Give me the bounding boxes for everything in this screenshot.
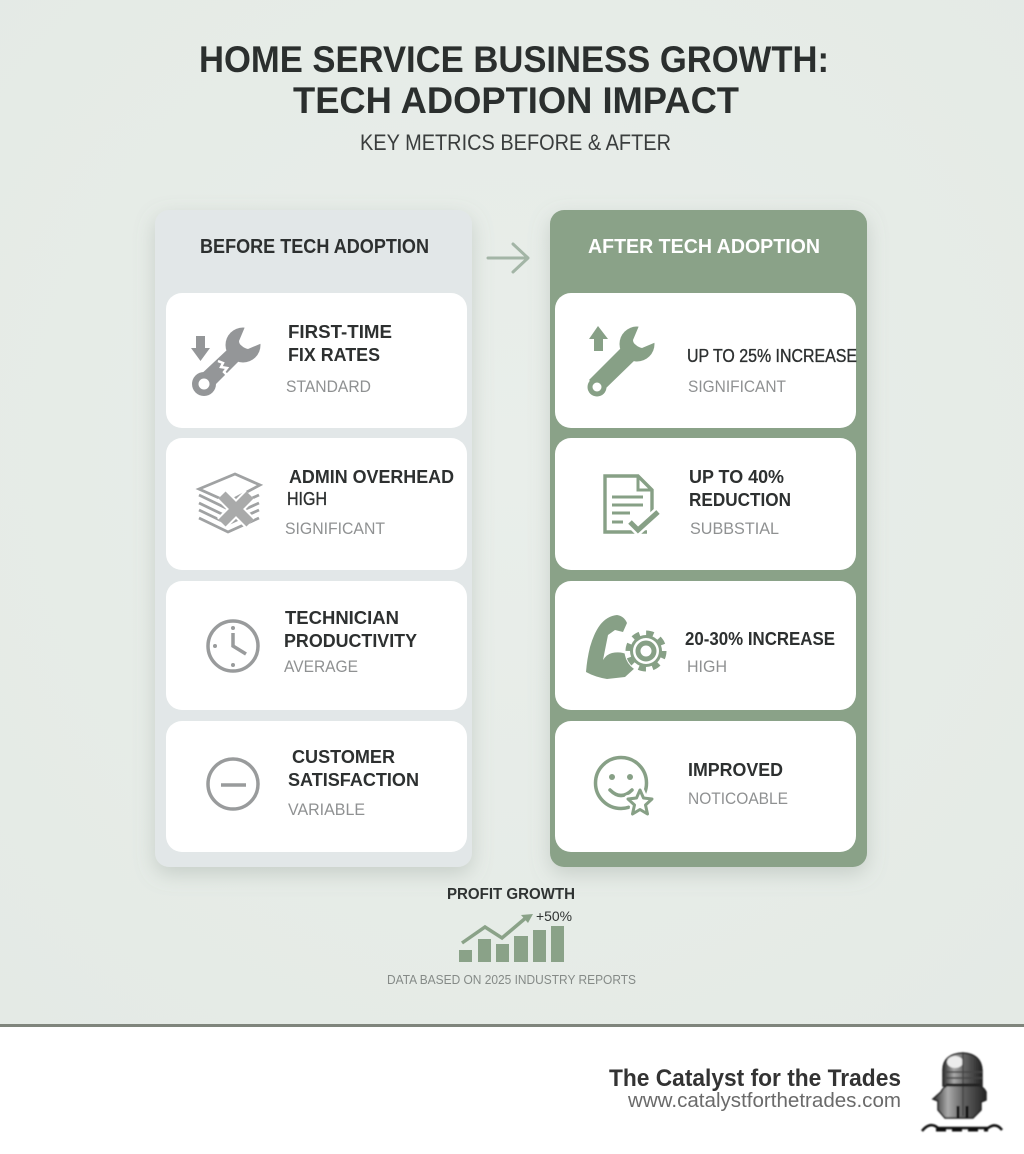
- card: technician productivity after: 20-30% INCREASE: [685, 628, 835, 649]
- card: technician productivity before: [166, 581, 467, 710]
- card: customer satisfaction after: [555, 721, 856, 852]
- brand name: The Catalyst for the Trades: [609, 1065, 901, 1092]
- card: admin overhead after: UP TO 40%: [689, 466, 784, 487]
- icon: clock: [208, 621, 258, 671]
- heading: after: AFTER TECH ADOPTION: [588, 236, 820, 258]
- card: first-time fix rates before: FIX RATES: [288, 344, 380, 365]
- card: first-time fix rates after: UP TO 25% INCREASE: [687, 346, 857, 366]
- profit growth heading: PROFIT GROWTH: [447, 886, 575, 903]
- card: technician productivity after: HIGH: [687, 658, 727, 676]
- source note: DATA BASED ON 2025 INDUSTRY REPORTS: [387, 972, 636, 987]
- profit growth bar chart: [459, 908, 572, 962]
- card: first-time fix rates before: STANDARD: [286, 378, 371, 396]
- card: technician productivity before: AVERAGE: [284, 658, 358, 676]
- card: first-time fix rates after: [555, 293, 857, 428]
- title: [199, 39, 829, 121]
- icon: flexed arm with gear: [586, 615, 668, 679]
- title: TECH ADOPTION IMPACT: [293, 80, 739, 121]
- card: technician productivity before: PRODUCTIVITY: [284, 630, 418, 651]
- card: customer satisfaction before: [166, 721, 467, 852]
- icon: smiley with star: [596, 758, 652, 814]
- icon: broken wrench with down arrow: [191, 322, 267, 396]
- card: technician productivity after: [555, 581, 856, 710]
- logo: microphone: [922, 1053, 1002, 1131]
- card: admin overhead after: REDUCTION: [689, 489, 791, 510]
- card: first-time fix rates before: [166, 293, 467, 428]
- card: admin overhead before: SIGNIFICANT: [285, 520, 385, 538]
- footer: [0, 1024, 1024, 1154]
- card: first-time fix rates after: SIGNIFICANT: [688, 378, 786, 396]
- icon: wrench with up arrow: [588, 321, 661, 396]
- profit growth bar chart: +50%: [536, 908, 572, 924]
- card: customer satisfaction before: CUSTOMER: [292, 746, 395, 767]
- icon: paper stack with x: [199, 474, 260, 532]
- title: HOME SERVICE BUSINESS GROWTH:: [199, 39, 829, 80]
- subtitle: KEY METRICS BEFORE & AFTER: [360, 130, 671, 155]
- card: customer satisfaction before: VARIABLE: [288, 801, 365, 819]
- website: www.catalystforthetrades.com: [627, 1090, 901, 1112]
- icon: document with check: [605, 476, 658, 532]
- card: customer satisfaction after: IMPROVED: [688, 759, 783, 780]
- panel: before tech adoption: [155, 210, 472, 867]
- card: admin overhead before: ADMIN OVERHEAD: [289, 466, 454, 487]
- card: customer satisfaction after: NOTICOABLE: [688, 790, 788, 808]
- card: admin overhead before: [166, 438, 467, 570]
- icon: minus circle: [208, 759, 258, 809]
- panel: after tech adoption: [550, 210, 867, 867]
- card: admin overhead after: [555, 438, 856, 570]
- arrow: before to after: [488, 244, 528, 272]
- card: customer satisfaction before: SATISFACTION: [288, 769, 419, 790]
- card: admin overhead before: HIGH: [287, 489, 327, 509]
- card: technician productivity before: TECHNICIAN: [285, 607, 399, 628]
- card: first-time fix rates before: FIRST-TIME: [288, 321, 392, 342]
- card: admin overhead after: SUBBSTIAL: [690, 520, 779, 538]
- heading: before: BEFORE TECH ADOPTION: [200, 236, 429, 258]
